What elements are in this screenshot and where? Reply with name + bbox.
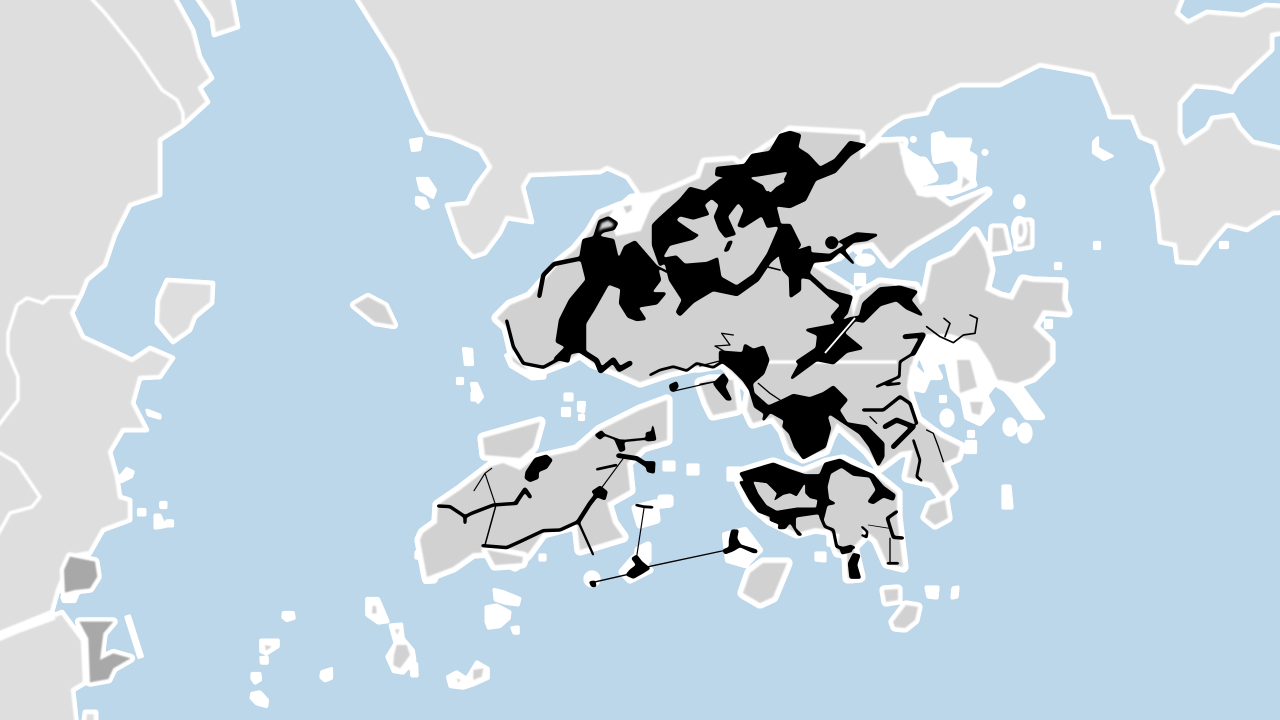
Lantau island xyxy=(420,400,667,577)
reclaimed land: dark grey areas xyxy=(62,410,173,682)
Lamma island xyxy=(743,563,787,603)
north-west New Territories xyxy=(507,218,733,392)
small rocks and islands, east and south xyxy=(910,337,1042,423)
Tuen Mun coastal strip xyxy=(505,352,547,379)
Lantau side islets xyxy=(416,393,740,560)
Nei Lingding island xyxy=(157,280,213,342)
white path through Sha Tin xyxy=(825,318,855,353)
cluster at northwest of Deep Bay xyxy=(610,193,660,235)
Hong Kong Island xyxy=(740,460,903,578)
grey interior of the belt xyxy=(663,176,785,285)
mainland north of the border xyxy=(348,0,1280,263)
islands in Mirs Bay xyxy=(992,222,1030,252)
horizontal white line: tunnel corridor xyxy=(768,360,897,364)
islets in Tolo Harbour xyxy=(854,246,862,254)
Tsing Yi island xyxy=(700,380,737,415)
grey interior on Hong Kong Island xyxy=(753,482,817,511)
coastal islets xyxy=(62,410,173,602)
Tai Po, Sha Tin and Kowloon xyxy=(713,233,923,481)
south peninsula xyxy=(0,612,85,720)
southern islands xyxy=(251,580,520,707)
breakwater xyxy=(125,615,143,658)
south Lantau bump xyxy=(487,550,523,565)
thin pipelines and fine strands xyxy=(474,267,977,583)
small islets west xyxy=(410,137,1228,420)
Sha Chau islet xyxy=(354,297,394,325)
Lantau and outlying islands xyxy=(438,424,757,587)
Hei Ling Chau xyxy=(725,530,760,565)
Cheung Chau xyxy=(584,571,600,587)
mainland west coast xyxy=(0,0,212,638)
black areas: west, Kowloon, islands xyxy=(438,218,923,587)
Peng Chau group xyxy=(622,498,670,580)
Double Haven island cluster xyxy=(900,133,1034,244)
reclamation 1 xyxy=(64,557,97,593)
black areas: central belt xyxy=(653,132,865,315)
New Territories and Kowloon xyxy=(497,131,1067,497)
Chek Lap Kok island xyxy=(483,422,540,458)
reclaimed piece xyxy=(82,712,96,720)
Kau Sai grey islands xyxy=(957,360,983,415)
boundary lines xyxy=(0,0,183,640)
estuary spit xyxy=(188,0,238,35)
Ninepin and Po Toi xyxy=(884,500,948,628)
Hong Kong Island xyxy=(740,459,903,578)
reclamation 2 xyxy=(79,622,131,682)
